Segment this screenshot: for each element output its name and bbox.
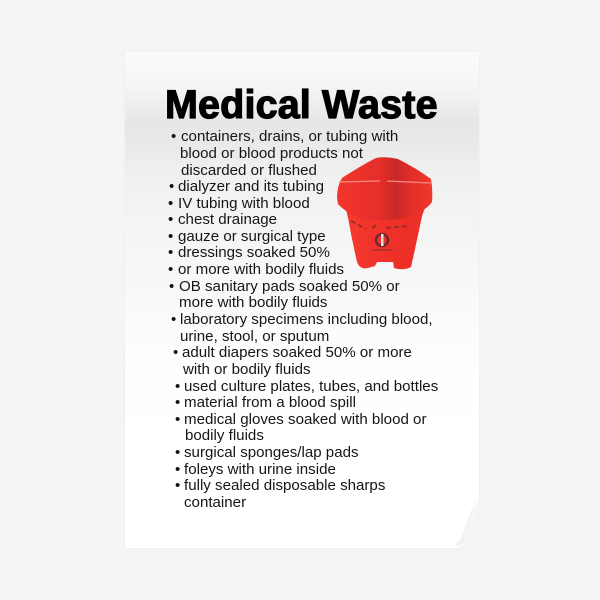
bullet list: discarded or flushed (181, 162, 317, 179)
bullet list: OB sanitary pads soaked 50% or (179, 278, 400, 295)
bullet list: • (168, 195, 173, 212)
bullet list: • (175, 411, 180, 428)
bullet list: with or bodily fluids (183, 361, 311, 378)
bullet list: • (175, 394, 180, 411)
page curl at bottom right corner (454, 499, 479, 548)
bullet list: • (173, 344, 178, 361)
bullet list: dialyzer and its tubing (178, 178, 324, 195)
bullet list: gauze or surgical type (178, 228, 326, 245)
bin lid (337, 157, 432, 220)
bullet list: • (168, 261, 173, 278)
bullet list: • (169, 278, 174, 295)
title: Medical Waste (165, 83, 438, 127)
bullet list: container (184, 494, 246, 511)
bullet list: urine, stool, or sputum (180, 328, 329, 345)
bullet list: more with bodily fluids (179, 294, 327, 311)
bullet list: blood or blood products not (180, 145, 363, 162)
bullet list: • (168, 244, 173, 261)
bullet list: foleys with urine inside (184, 461, 336, 478)
bullet list: • (175, 378, 180, 395)
bin body (345, 205, 426, 269)
bullet list: • (168, 228, 173, 245)
bullet list: • (175, 477, 180, 494)
bullet list: • (171, 311, 176, 328)
bullet list: laboratory specimens including blood, (180, 311, 433, 328)
bullet list: • (175, 461, 180, 478)
bullet list: material from a blood spill (184, 394, 356, 411)
bullet list: chest drainage (178, 211, 277, 228)
bullet list: surgical sponges/lap pads (184, 444, 359, 461)
bullet list: fully sealed disposable sharps (184, 477, 385, 494)
bullet list: or more with bodily fluids (178, 261, 344, 278)
bullet list: IV tubing with blood (178, 195, 310, 212)
bullet list: bodily fluids (185, 427, 264, 444)
bullet list: dressings soaked 50% (178, 244, 330, 261)
bullet list: adult diapers soaked 50% or more (182, 344, 412, 361)
bullet list: • (171, 128, 176, 145)
bullet list: • (169, 178, 174, 195)
bullet list: medical gloves soaked with blood or (184, 411, 426, 428)
bullet list: used culture plates, tubes, and bottles (184, 378, 438, 395)
bullet list: containers, drains, or tubing with (181, 128, 398, 145)
bullet list: • (168, 211, 173, 228)
bullet list: • (175, 444, 180, 461)
poster sheet (125, 52, 479, 548)
icon: red biohazard waste bin (337, 157, 432, 270)
